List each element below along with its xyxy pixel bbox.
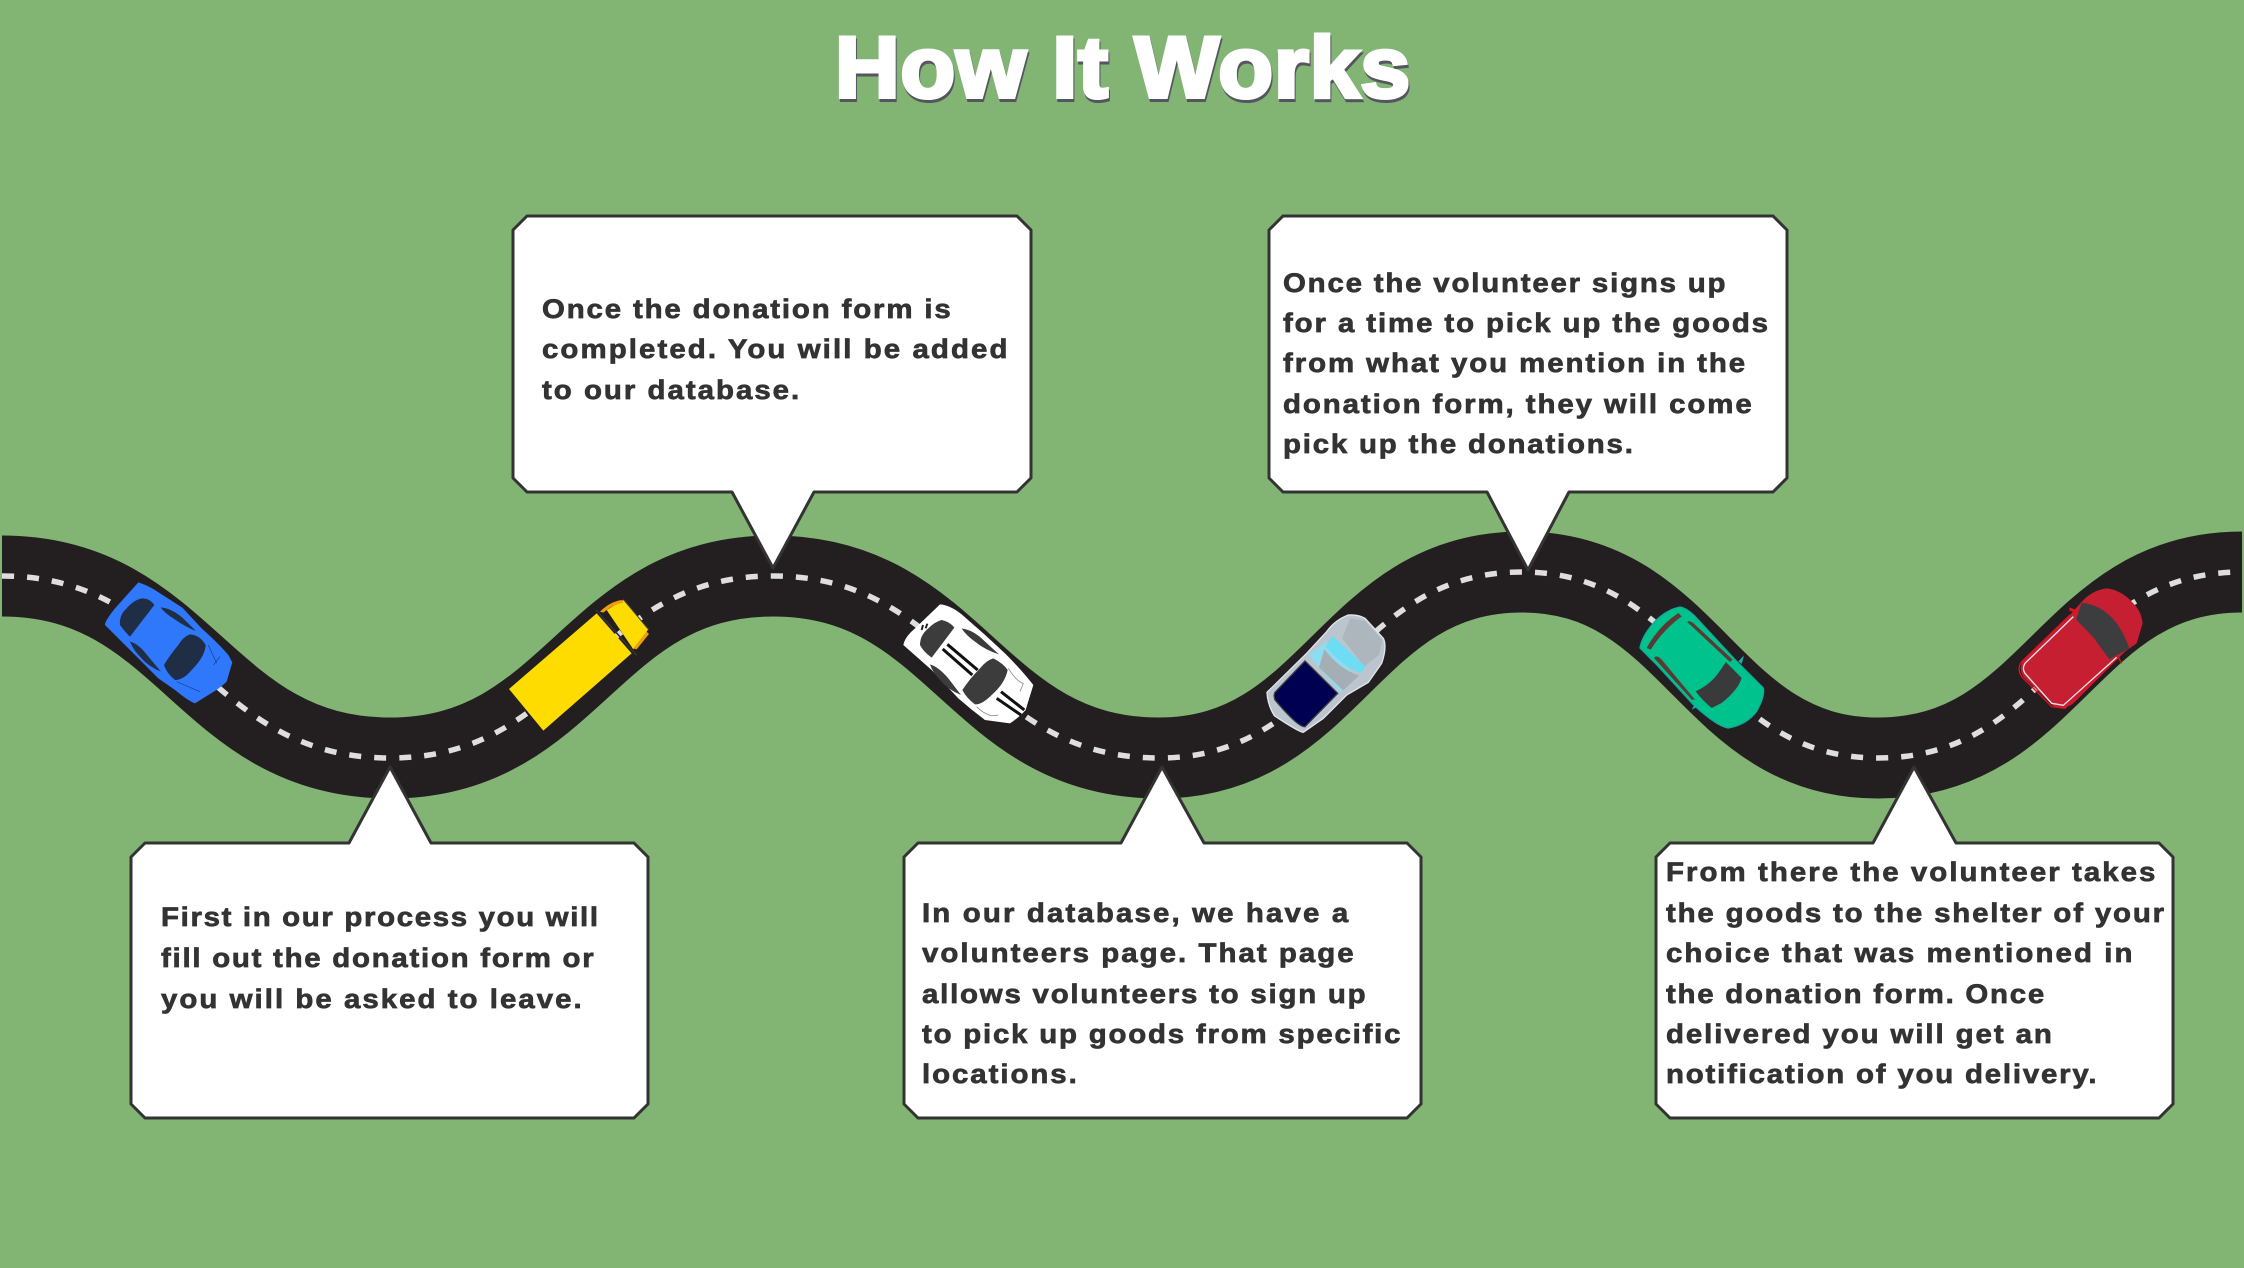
callout: step 4 xyxy=(1269,216,1787,570)
car: blue sports car xyxy=(105,582,232,703)
callout: step 3: In our database, we have a xyxy=(922,897,1348,928)
callout: step 5: the goods to the shelter of your xyxy=(1666,897,2164,928)
callout: step 3 xyxy=(904,767,1421,1118)
title: How It Works xyxy=(835,20,1410,116)
callout: step 4: donation form, they will come xyxy=(1283,388,1752,419)
callout: step 5: notification of you delivery. xyxy=(1666,1058,2097,1089)
car: red hatchback xyxy=(2019,588,2143,708)
truck: yellow box truck xyxy=(509,599,649,731)
callout: step 3: allows volunteers to sign up xyxy=(922,978,1366,1009)
callout: step 3: locations. xyxy=(922,1058,1077,1089)
callout: step 5: From there the volunteer takes xyxy=(1666,856,2155,887)
road xyxy=(2,572,2242,758)
callout: step 2 xyxy=(513,216,1031,568)
callout: step 2: completed. You will be added xyxy=(542,333,1007,364)
callout: step 4: pick up the donations. xyxy=(1283,428,1633,459)
callout: step 2: Once the donation form is xyxy=(542,293,951,324)
car: silver pickup with navy bed xyxy=(1267,615,1385,732)
callout: step 4: from what you mention in the xyxy=(1283,347,1745,378)
car: teal hatchback xyxy=(1640,607,1764,728)
callout: step 2: to our database. xyxy=(542,374,799,405)
callout: step 1: First in our process you will xyxy=(161,901,598,932)
callout: step 1 xyxy=(131,767,648,1118)
callout: step 4: for a time to pick up the goods xyxy=(1283,307,1768,338)
callout: step 5: the donation form. Once xyxy=(1666,978,2044,1009)
callout: step 3: to pick up goods from specific xyxy=(922,1018,1401,1049)
callout: step 5 xyxy=(1656,767,2173,1118)
callout: step 3: volunteers page. That page xyxy=(922,937,1354,968)
callout: step 1: you will be asked to leave. xyxy=(161,983,582,1014)
callout: step 5: delivered you will get an xyxy=(1666,1018,2052,1049)
car: white sports car with black stripes xyxy=(903,604,1033,723)
callout: step 1: fill out the donation form or xyxy=(161,942,594,973)
callout: step 4: Once the volunteer signs up xyxy=(1283,267,1726,298)
callout: step 5: choice that was mentioned in xyxy=(1666,937,2133,968)
